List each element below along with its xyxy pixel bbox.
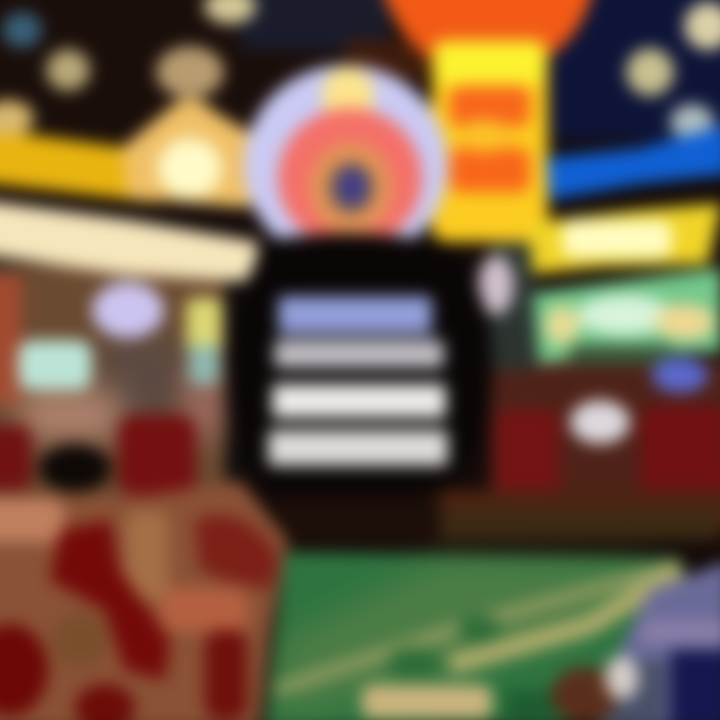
poker chips left (0, 480, 288, 720)
ceiling background (0, 0, 720, 140)
floor strip (280, 495, 440, 545)
right wall (478, 240, 720, 530)
cream band (0, 200, 258, 282)
green screen (533, 268, 720, 365)
right wall details (430, 357, 720, 540)
lamp column (380, 0, 595, 242)
right yellow band (528, 203, 720, 274)
left wall (0, 260, 255, 495)
black sign (228, 234, 492, 498)
roulette wheel (244, 65, 448, 265)
left gold band (0, 99, 250, 208)
red seats left (0, 415, 196, 495)
screens on left wall (18, 282, 222, 390)
sign text rows (268, 296, 448, 466)
green table (265, 552, 720, 720)
blue chips and hand bottom right (551, 560, 720, 720)
right blue band (546, 124, 720, 200)
